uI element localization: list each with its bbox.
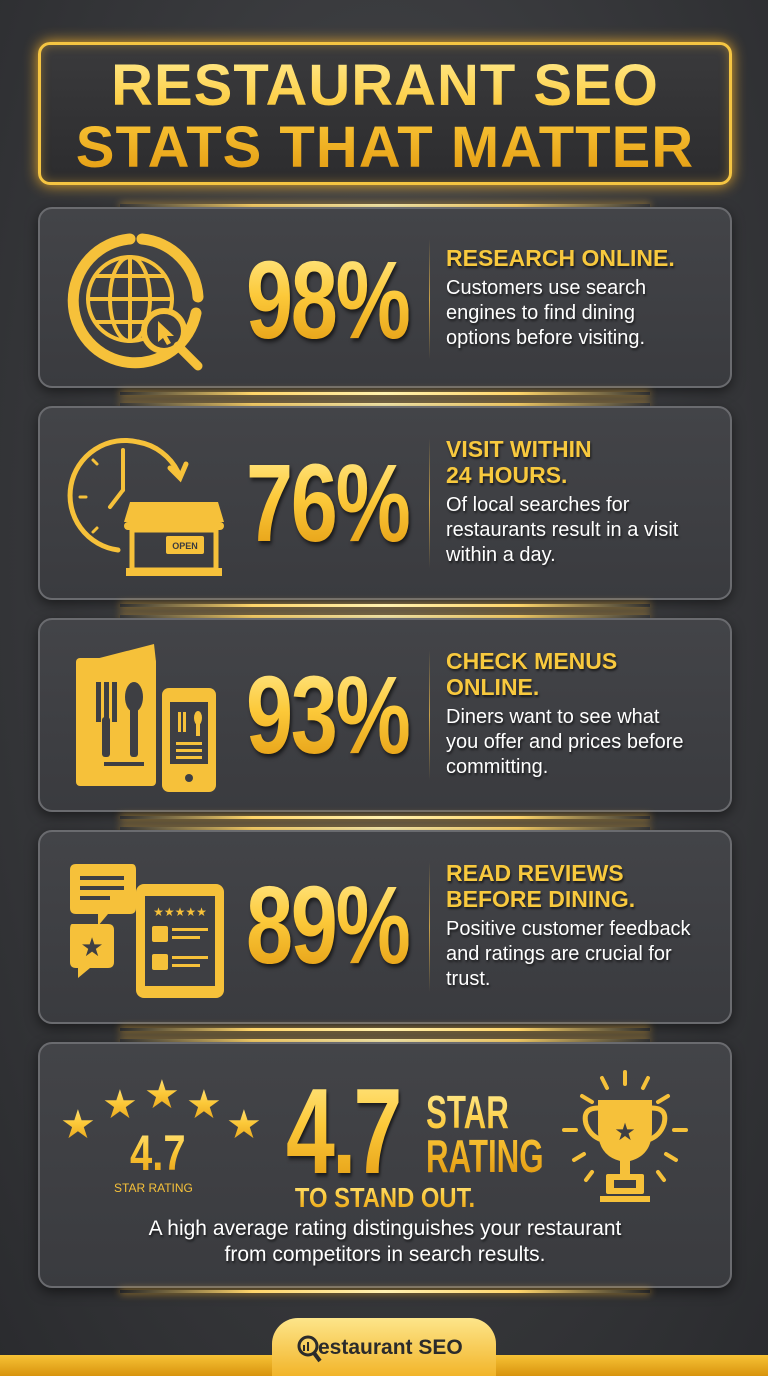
- text block: Positive customer feedback and ratings are crucial for trust.: [446, 918, 691, 990]
- text block: Of local searches for restaurants result in a visit within a day.: [446, 494, 678, 566]
- icon: clock and shop: OPEN: [172, 541, 198, 551]
- icon: star arc with 4.7: [60, 1072, 262, 1195]
- text block: [446, 436, 680, 568]
- star rating label: [426, 1090, 544, 1178]
- panel: read reviews: [38, 830, 732, 1024]
- title text: [41, 55, 729, 179]
- description: from competitors in search results.: [225, 1243, 545, 1266]
- star rating label: STAR: [426, 1086, 509, 1138]
- text block: 24 HOURS.: [446, 462, 567, 488]
- icon: star arc with 4.7: ★: [102, 1082, 138, 1128]
- footer bar: [0, 1355, 768, 1376]
- icon: menu and phone: [76, 644, 216, 792]
- icon: reviews tablet: ★: [80, 933, 104, 963]
- icon: reviews tablet: ★★★★★: [153, 905, 207, 919]
- icon: star arc with 4.7: 4.7: [130, 1125, 186, 1181]
- panel: star rating: [38, 1042, 732, 1288]
- icon: trophy: [562, 1070, 688, 1202]
- stat number: 76%: [246, 442, 409, 565]
- icon: clock and shop: [68, 438, 224, 576]
- icon: star arc with 4.7: ★: [144, 1072, 180, 1118]
- text block: [446, 648, 684, 780]
- panel: research online: [38, 207, 732, 388]
- text block: Customers use search engines to find dining options before visiting.: [446, 277, 646, 349]
- icon: star arc with 4.7: ★: [60, 1102, 96, 1148]
- icon: reviews tablet: [70, 864, 224, 998]
- text block: [446, 245, 675, 351]
- icon: trophy: ★: [614, 1118, 636, 1146]
- logo: estaurant SEO: [318, 1336, 463, 1359]
- panel: visit within 24 hours: [38, 406, 732, 600]
- description: A high average rating distinguishes your restaurant: [149, 1217, 621, 1240]
- icon: globe search: [68, 234, 204, 370]
- title text: RESTAURANT SEO: [111, 53, 659, 118]
- stat number: 89%: [246, 864, 409, 987]
- stat number: 93%: [246, 654, 409, 777]
- text block: READ REVIEWS: [446, 860, 624, 886]
- to stand out heading: [92, 1182, 678, 1214]
- panel: check menus online: [38, 618, 732, 812]
- to stand out heading: TO STAND OUT.: [295, 1182, 475, 1213]
- footer logo tab: [272, 1318, 496, 1376]
- icon: star arc with 4.7: ★: [226, 1102, 262, 1148]
- text block: Diners want to see what you offer and prices before committing.: [446, 706, 684, 778]
- title box: [38, 42, 732, 185]
- text block: BEFORE DINING.: [446, 886, 635, 912]
- text block: CHECK MENUS: [446, 648, 617, 674]
- stat number: 98%: [246, 239, 409, 362]
- text block: ONLINE.: [446, 674, 539, 700]
- text block: RESEARCH ONLINE.: [446, 245, 675, 271]
- title text: STATS THAT MATTER: [76, 115, 694, 180]
- icon: star arc with 4.7: ★: [186, 1082, 222, 1128]
- text block: [446, 860, 692, 990]
- icon: star arc with 4.7: STAR RATING: [114, 1181, 193, 1195]
- text block: VISIT WITHIN: [446, 436, 592, 462]
- description: [148, 1217, 622, 1268]
- big rating number: 4.7: [286, 1063, 399, 1199]
- star rating label: RATING: [426, 1130, 544, 1182]
